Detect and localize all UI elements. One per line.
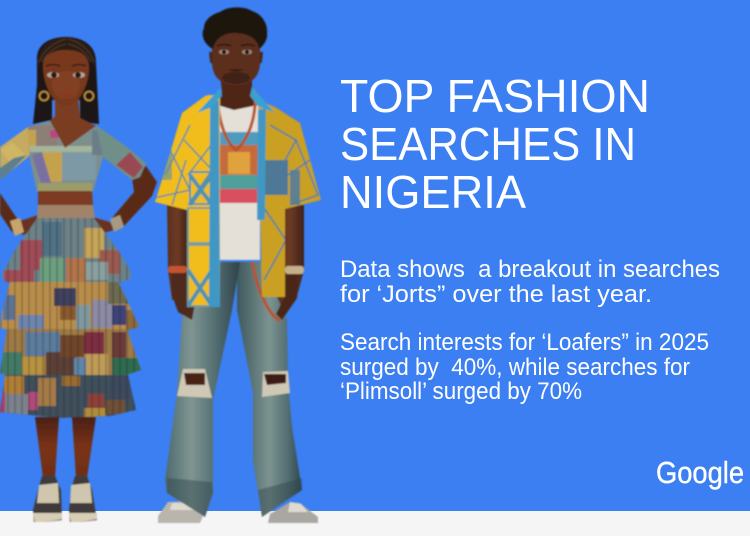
face — [43, 50, 89, 106]
jeans — [237, 262, 302, 517]
text block: Loafers and Plimsoll: surged by 40%, while searches for — [340, 354, 690, 381]
bracelets — [10, 218, 24, 236]
man's sneakers — [158, 501, 204, 523]
skirt tier 1 — [1, 217, 132, 284]
title — [340, 70, 650, 218]
man's eyes — [219, 50, 229, 54]
mouth — [59, 94, 74, 98]
hair back — [33, 37, 99, 124]
eyes and brows — [47, 72, 59, 78]
title: SEARCHES IN — [340, 118, 636, 170]
bracelets — [168, 266, 187, 273]
necklace — [218, 90, 255, 150]
sneakers — [33, 476, 97, 522]
placket right — [257, 108, 266, 220]
skirt tier 4 — [0, 372, 140, 420]
illustration: man in yellow shirt and ripped jeans — [150, 7, 325, 523]
hair cornrows — [37, 37, 96, 70]
sleeves — [0, 127, 34, 180]
ears — [209, 52, 263, 66]
legs — [35, 417, 59, 478]
belt chain — [252, 262, 280, 321]
illustration: woman in patchwork dress — [0, 37, 157, 522]
man's mouth — [228, 69, 244, 72]
shirt right — [257, 103, 322, 298]
arms — [0, 166, 157, 232]
title: TOP FASHION — [340, 70, 650, 122]
text block: Loafers and Plimsoll: ‘Plimsoll’ surged by 70% — [340, 378, 582, 405]
right hand — [276, 270, 298, 320]
hands — [17, 213, 49, 235]
skirt tier 3 — [0, 328, 142, 376]
crop top — [27, 120, 104, 192]
hair — [203, 7, 267, 49]
tee — [217, 103, 260, 260]
text block: Loafers and Plimsoll: Search interests for ‘Loafers” in 2025 — [340, 329, 709, 356]
text block: Jorts breakout — [340, 256, 720, 308]
placket left — [209, 100, 220, 307]
shirt left — [150, 95, 222, 310]
text block: Jorts breakout: Data shows a breakout in searches — [340, 256, 720, 283]
left hand — [171, 270, 196, 320]
floor band — [0, 511, 750, 536]
waistband — [37, 205, 95, 218]
skirt tier 2 — [0, 281, 140, 331]
midriff — [38, 191, 93, 206]
title: NIGERIA — [340, 166, 526, 218]
text block: Loafers and Plimsoll — [340, 329, 709, 405]
collar — [197, 87, 275, 113]
man's arms — [167, 205, 188, 300]
neck and chest — [50, 95, 96, 148]
text block: Jorts breakout: for ‘Jorts” over the last year. — [340, 281, 652, 308]
earrings — [40, 92, 48, 100]
head — [212, 30, 260, 85]
knee rips — [177, 369, 212, 398]
jeans hem shadow — [167, 478, 213, 517]
neck — [218, 75, 258, 110]
